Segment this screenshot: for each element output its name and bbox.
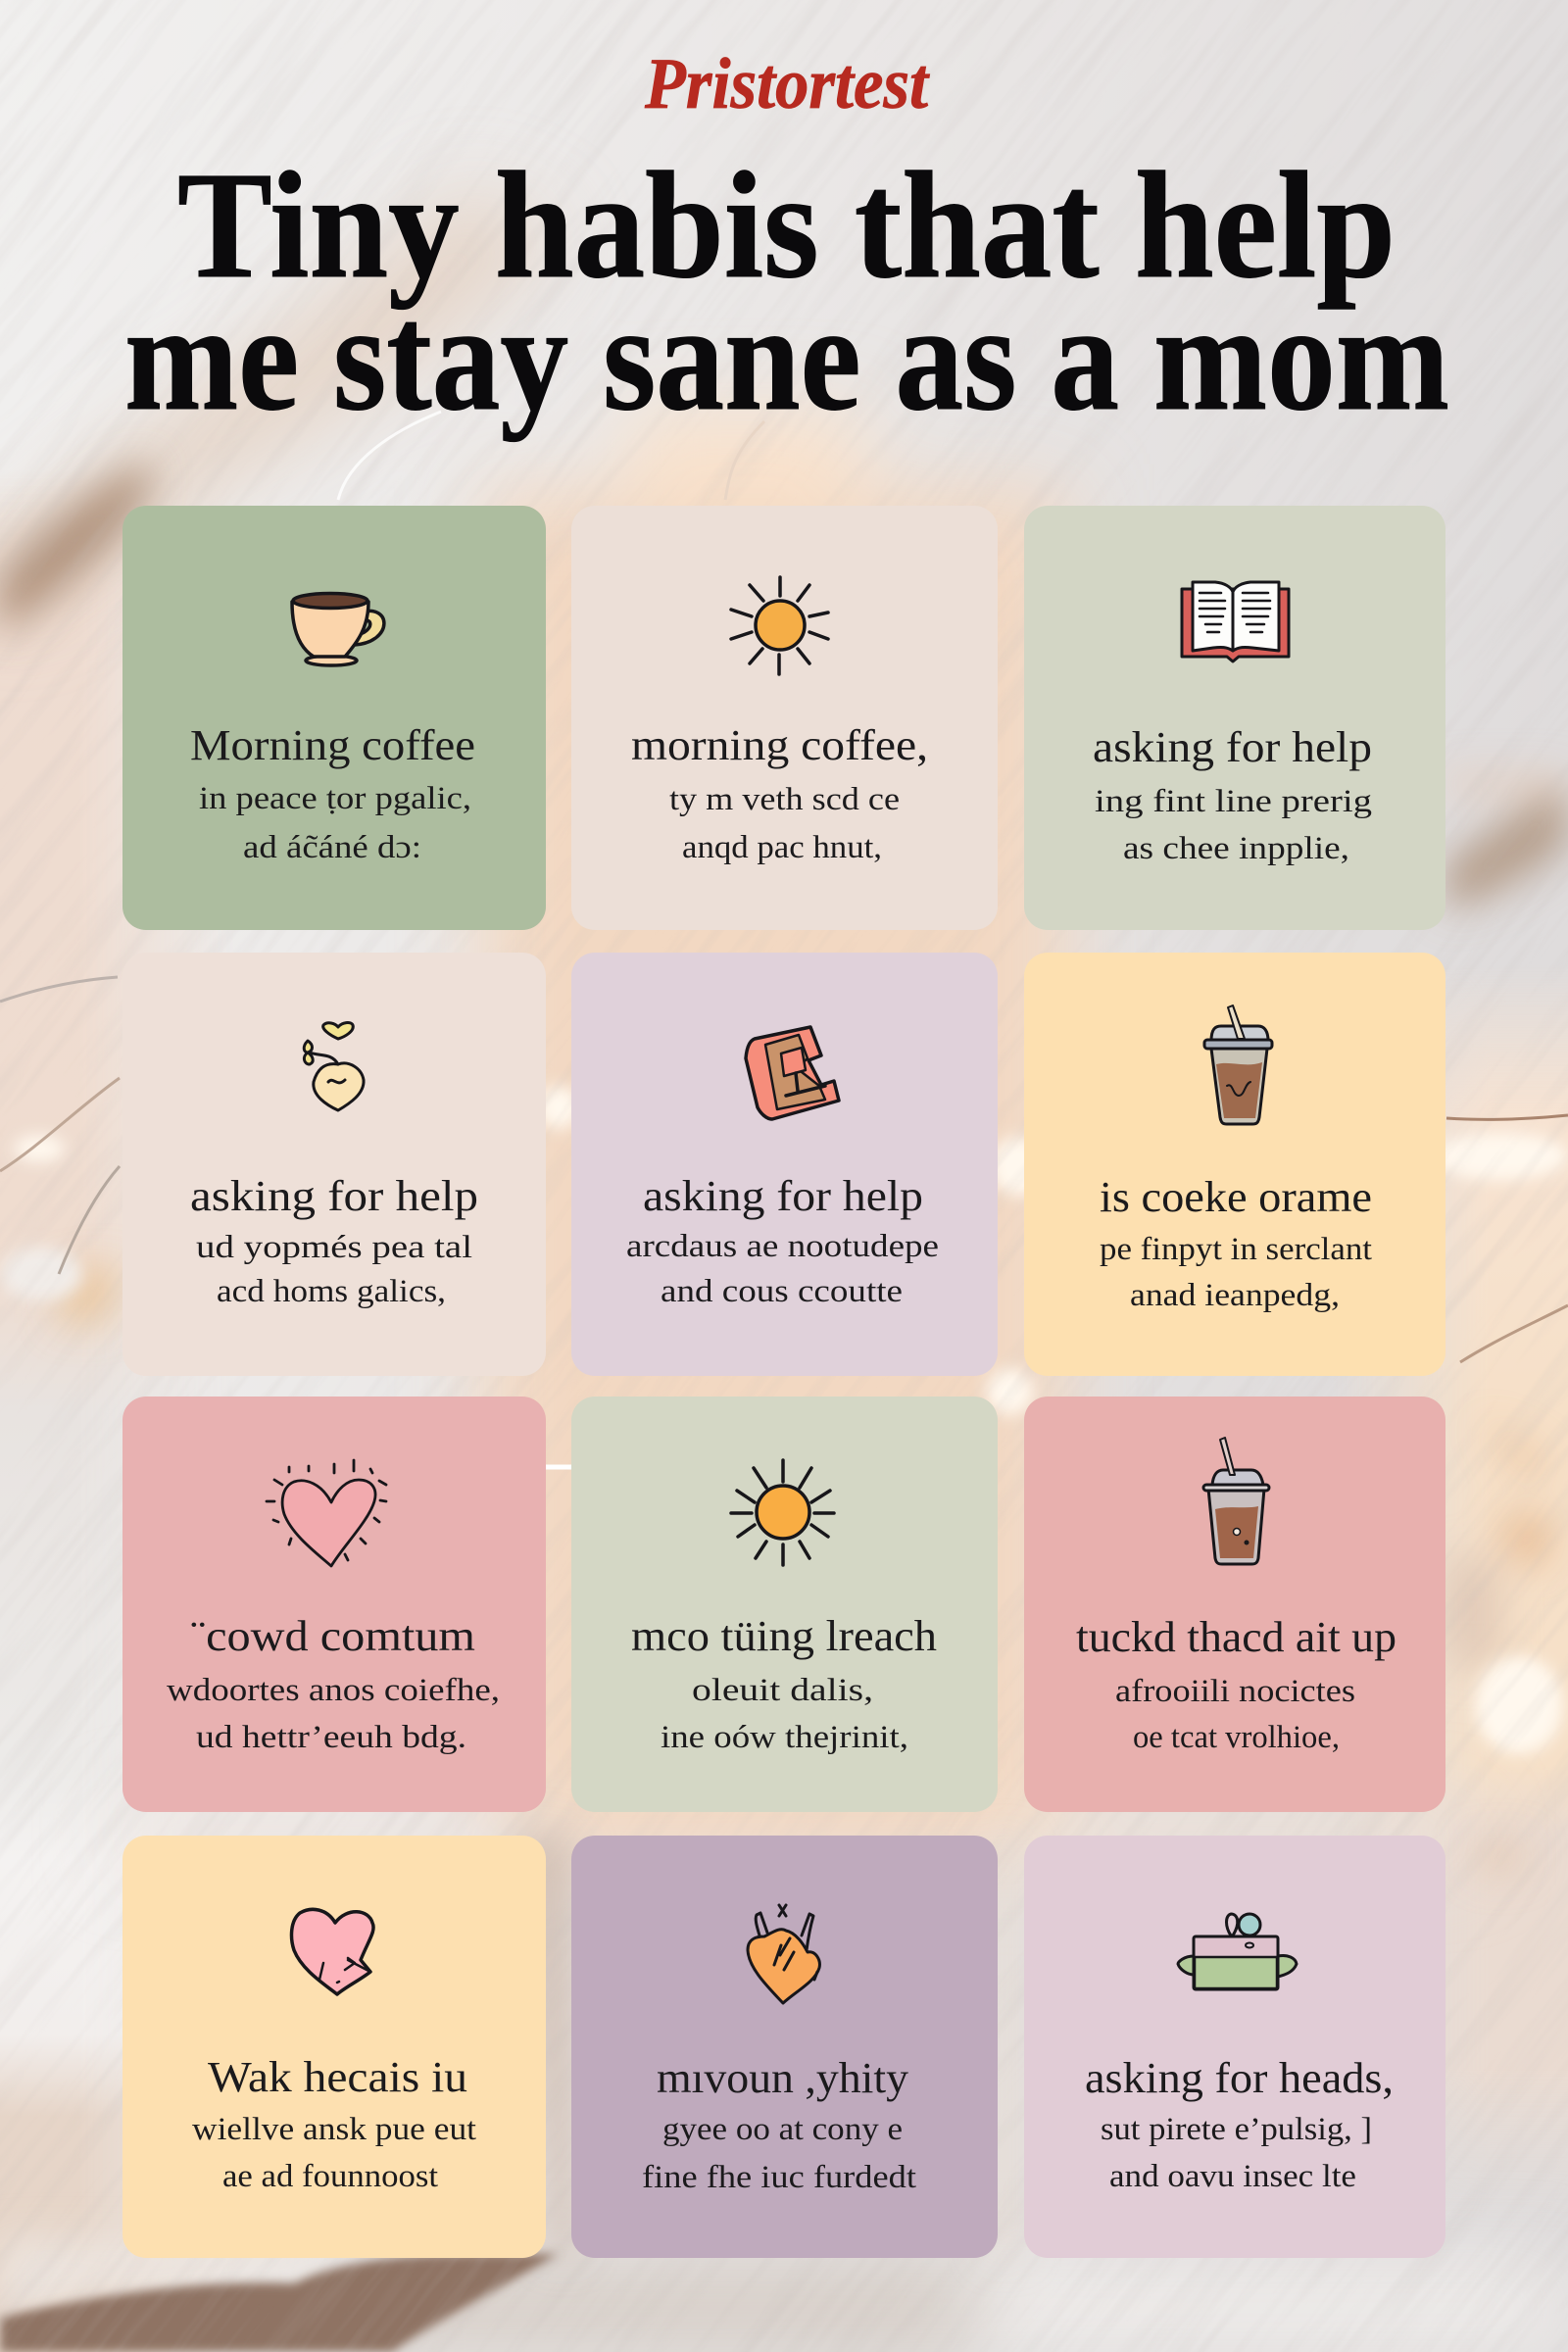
- body text: wdoortes anos coiefhe,: [167, 1673, 500, 1708]
- body text: [167, 1673, 500, 1755]
- panel: card 4 asking for help: [122, 953, 546, 1376]
- body text: acd homs galics,: [217, 1274, 446, 1309]
- panel: card 11 mivoun yhity: [571, 1836, 998, 2258]
- body text: [1095, 784, 1372, 866]
- icon: pot: [1178, 1914, 1297, 1989]
- icon: coffee machine: [746, 1027, 839, 1119]
- panel: card 12 asking for heads: [1024, 1836, 1446, 2258]
- body text: ud hettr’eeuh bdg.: [196, 1720, 466, 1755]
- body text: and oavu insec lte: [1109, 2159, 1356, 2194]
- title: [124, 140, 1449, 442]
- body text: ty m veth scd ce: [669, 782, 900, 817]
- heading text: asking for help: [643, 1172, 923, 1220]
- body text: oe tcat vrolhioe,: [1133, 1720, 1340, 1755]
- heading text: mco tüing lreach: [631, 1612, 937, 1660]
- heading text: is coeke orame: [1100, 1173, 1372, 1221]
- heading text: asking for heads,: [1085, 2054, 1394, 2102]
- heading text: Morning coffee: [190, 721, 475, 769]
- icon: sun: [731, 577, 828, 674]
- panel: card 1 morning coffee: [122, 506, 546, 930]
- heading text: Wak hecais iu: [208, 2053, 467, 2101]
- panel: card 3 asking for help: [1024, 506, 1446, 930]
- body text: [642, 2112, 916, 2195]
- body text: [1115, 1674, 1355, 1755]
- body text: [669, 782, 900, 865]
- icon: sprout heart: [304, 1023, 364, 1110]
- panel: card 7 cowd comtum: [122, 1396, 546, 1812]
- body text: arcdaus ae nootudepe: [626, 1229, 939, 1264]
- body text: ad ác̃áné dɔ:: [243, 830, 421, 865]
- icon: iced coffee cup: [1204, 1005, 1272, 1124]
- body text: fine fhe iuc furdedt: [642, 2160, 916, 2195]
- body text: wiellve ansk pue eut: [192, 2112, 476, 2147]
- icon: coffee cup: [292, 594, 384, 665]
- body text: gyee oo at cony e: [662, 2112, 903, 2147]
- heading text: morning coffee,: [631, 721, 928, 769]
- body text: and cous ccoutte: [661, 1274, 903, 1309]
- body text: ine oów thejrinit,: [661, 1720, 908, 1755]
- logo wordmark: Pristortest: [644, 44, 930, 124]
- heading text: tuckd thacd ait up: [1076, 1613, 1396, 1661]
- icon: open book: [1182, 582, 1289, 662]
- panel: card 9 tuckd thacd ait up: [1024, 1396, 1446, 1812]
- heading text: mıvoun ,yhity: [657, 2054, 908, 2102]
- heading text: ¨cowd comtum: [190, 1612, 475, 1660]
- title: me stay sane as a mom: [124, 272, 1449, 442]
- body text: anad ieanpedg,: [1130, 1278, 1340, 1313]
- heading text: asking for help: [1093, 723, 1372, 771]
- body text: oleuit dalis,: [692, 1673, 873, 1708]
- body text: afrooiili nocictes: [1115, 1674, 1355, 1709]
- body text: ing fint line prerig: [1095, 784, 1372, 819]
- panel: card 8 mco tuing lreach: [571, 1396, 998, 1812]
- panel: card 2 morning coffee: [571, 506, 998, 930]
- body text: ae ad founnoost: [222, 2159, 438, 2194]
- icon: clasped hands: [748, 1905, 819, 2003]
- body text: [196, 1230, 472, 1309]
- title: Tiny habis that help: [177, 140, 1396, 310]
- body text: [1101, 2112, 1372, 2194]
- body text: anqd pac hnut,: [682, 830, 882, 865]
- body text: [199, 781, 471, 865]
- icon: pink heart: [292, 1909, 373, 1994]
- panel: card 6 iced coffee: [1024, 953, 1446, 1376]
- icon: iced coffee cup: [1203, 1438, 1269, 1564]
- body text: pe finpyt in serclant: [1100, 1232, 1372, 1267]
- body text: as chee inpplie,: [1123, 831, 1349, 866]
- icon: sun: [731, 1460, 834, 1565]
- panel: card 5 asking for help: [571, 953, 998, 1376]
- body text: [1100, 1232, 1372, 1313]
- panel: card 10 wak hecais iu: [122, 1836, 546, 2258]
- body text: [192, 2112, 476, 2194]
- body text: ud yopmés pea tal: [196, 1230, 472, 1265]
- body text: in peace ṭor pgalic,: [199, 781, 471, 816]
- heading text: asking for help: [190, 1172, 478, 1220]
- body text: sut pirete e’pulsig, ]: [1101, 2112, 1372, 2147]
- body text: [661, 1673, 908, 1755]
- icon: heart with rays: [267, 1460, 386, 1566]
- body text: [626, 1229, 939, 1309]
